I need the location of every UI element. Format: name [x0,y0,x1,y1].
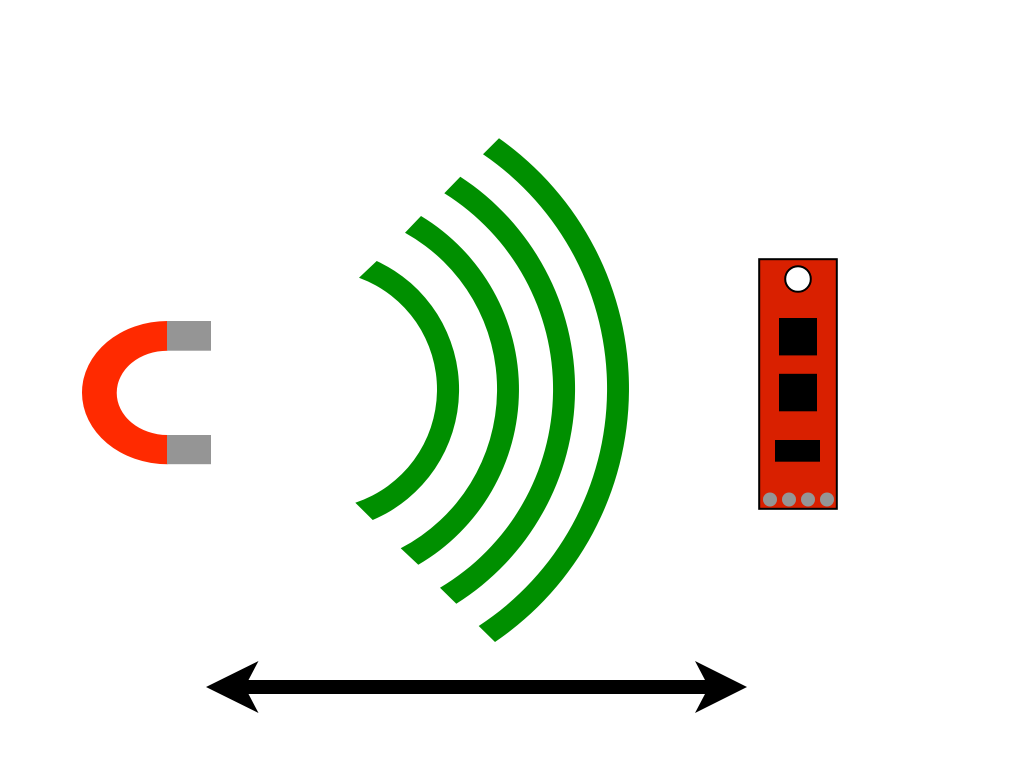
wave 3 [440,177,575,604]
icon: horseshoe magnet [82,321,211,464]
wave 2 [401,216,519,565]
wave 1 [355,261,459,520]
sensor board [759,259,837,509]
connector pins [763,492,834,506]
mounting hole [785,266,811,292]
chip 3 [775,440,820,462]
arrow: double-headed distance arrow [206,661,747,713]
chip 2 [779,374,817,411]
board body [759,259,837,509]
wave 4 [479,138,629,642]
chip 1 [779,318,817,355]
magnet body [82,321,168,464]
magnet bottom pole [167,435,211,464]
magnetic field waves [355,138,629,642]
magnet top pole [167,321,211,351]
